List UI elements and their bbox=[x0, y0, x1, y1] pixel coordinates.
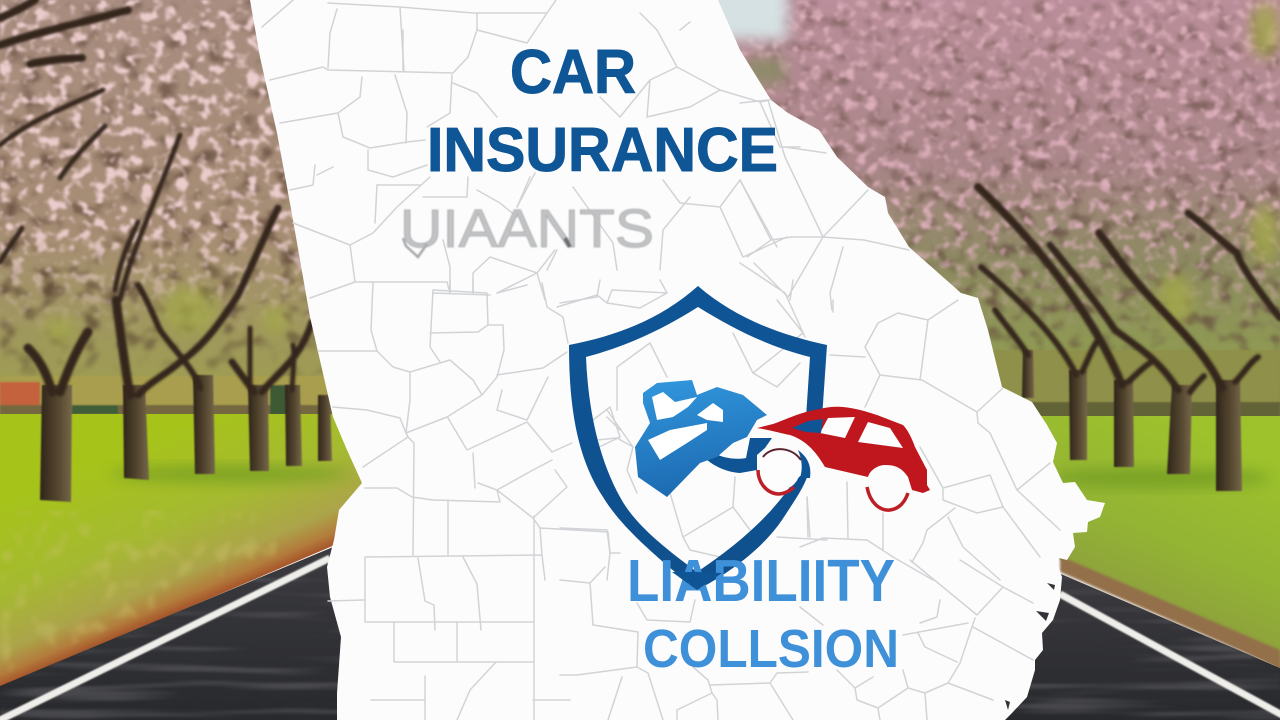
road streaks left bbox=[0, 542, 345, 720]
grass left bbox=[0, 414, 370, 688]
blue bar seen through hood gap bbox=[792, 419, 823, 433]
road lane lines bbox=[0, 558, 1280, 720]
sky glimpse bbox=[700, 0, 788, 84]
road streaks right bbox=[1000, 565, 1280, 720]
icon: red car bbox=[757, 407, 930, 510]
red car rear wheel bbox=[867, 487, 908, 510]
dirt verge right bbox=[1060, 556, 1280, 668]
shield tip over label bbox=[672, 572, 722, 590]
title line: INSURANCE: INSURANCE bbox=[427, 116, 778, 185]
distant hedge and horizon bbox=[0, 350, 1280, 417]
canopy base right bbox=[700, 0, 1280, 418]
branches right bbox=[978, 187, 1280, 392]
shield swoosh into crash bbox=[705, 438, 810, 478]
county lines bbox=[262, 0, 1060, 720]
branches left bbox=[0, 0, 312, 395]
tree trunks left bbox=[40, 375, 332, 502]
tree shadows bbox=[110, 466, 1270, 488]
icon: shield with crashed cars bbox=[569, 286, 930, 590]
canopy base left bbox=[0, 0, 380, 418]
Georgia state map silhouette bbox=[250, 0, 1105, 720]
label: COLLISION: COLLSION bbox=[643, 619, 899, 679]
label: LIABILITY: LIABILIITY bbox=[627, 548, 895, 614]
title line: CAR: CAR bbox=[510, 38, 636, 107]
faded subtitle: garbled text: UIAANTS bbox=[400, 199, 654, 259]
icon: front wheel bbox=[758, 449, 801, 494]
icon: crumpled blue car bbox=[635, 380, 767, 497]
road left bbox=[0, 542, 345, 720]
grass flecks left bbox=[0, 510, 290, 676]
tree trunks right bbox=[1022, 350, 1242, 491]
road right bbox=[1000, 565, 1280, 720]
shield outline bbox=[569, 286, 827, 590]
coastal specks bbox=[1005, 583, 1055, 710]
blossom texture bbox=[0, 0, 380, 380]
grass right bbox=[1020, 416, 1280, 668]
title: CAR INSURANCE bbox=[427, 38, 778, 185]
greenery patches bbox=[44, 2, 1279, 342]
